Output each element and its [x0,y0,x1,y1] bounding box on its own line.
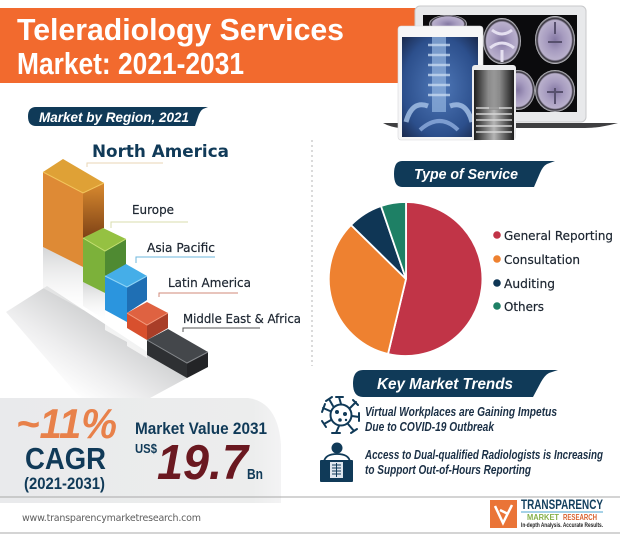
bar: Asia Pacific [105,264,147,322]
heading pill: Key Market Trends [353,370,558,397]
stat: market value 2031: Market Value 2031 [135,419,267,438]
stat: CAGR: ~11% [16,400,117,447]
label: Middle East & Africa: Middle East & Africa [183,312,301,326]
laptop [383,6,618,128]
label: Europe [111,203,188,228]
footer rules [0,496,620,498]
label: North America: North America [92,142,229,162]
logo mark [490,500,517,528]
heading pill: Market by Region: Market by Region, 2021 [39,109,189,125]
logo tagline: market research: MARKET [527,513,559,522]
bar: Latin America [127,302,168,340]
legend: Auditing: Auditing [504,276,555,291]
tablet [398,26,483,140]
3D bar chart: market by region [6,142,301,398]
stat: market value 2031: US$ [135,442,157,456]
slice: Consultation [329,225,406,354]
phone [472,65,516,140]
stat: market value 2031 [135,419,267,490]
trend text: dual-qualified radiologists: to Support Out-of-Hours Reporting [365,463,531,477]
legend: Consultation: Consultation [504,252,580,267]
logo tagline: market research: RESEARCH [563,513,597,522]
website url: www.transparencymarketresearch.com [22,513,201,524]
icon: radiologist viewing x-ray [320,442,353,482]
title text: Teleradiology Services [17,12,344,47]
legend: Others: Others [504,299,544,314]
trend text: virtual workplaces: Virtual Workplaces are Gaining Impetus [365,405,557,419]
heading pill: Type of Service: Type of Service [414,166,518,183]
heading pill: Type of Service [394,161,555,187]
slice: Others [381,202,406,279]
title text [17,12,344,81]
label: Middle East & Africa [183,312,301,332]
label: Europe: Europe [132,203,174,217]
stat: CAGR: (2021-2031) [24,474,105,493]
legend: General Reporting: General Reporting [504,228,613,243]
logo tagline: market research [527,513,597,522]
stat: market value 2031: Bn [247,466,263,483]
label: Asia Pacific [136,241,215,263]
bar: North America [43,159,104,267]
stat: CAGR [16,400,117,493]
slice: General Reporting [388,202,482,356]
logo: Transparency Market Research [490,496,603,529]
trend text: dual-qualified radiologists [364,448,603,477]
trend text: virtual workplaces [365,405,557,434]
label: Asia Pacific: Asia Pacific [147,241,215,255]
stats panel background [0,398,281,503]
floor shadow [6,247,187,398]
pie chart: type of service [329,202,482,356]
slice: Auditing [351,206,406,279]
stat: market value 2031: 19.7 [157,436,251,490]
devices illustration: laptop, tablet and phone with radiology scans [383,6,618,140]
label: Latin America: Latin America [168,276,251,290]
title text: Market: 2021-2031 [17,46,244,81]
heading pill: Key Market Trends: Key Market Trends [377,376,513,393]
divider [311,140,313,366]
trend text: virtual workplaces: Due to COVID-19 Outbreak [365,420,495,434]
bar: Europe [83,228,126,293]
icon: virus [322,397,359,433]
bar: Middle East & Africa [147,329,208,378]
label: Latin America [159,276,251,297]
stat: CAGR: CAGR [25,441,106,476]
title banner [0,8,420,83]
pie legend [493,228,613,314]
